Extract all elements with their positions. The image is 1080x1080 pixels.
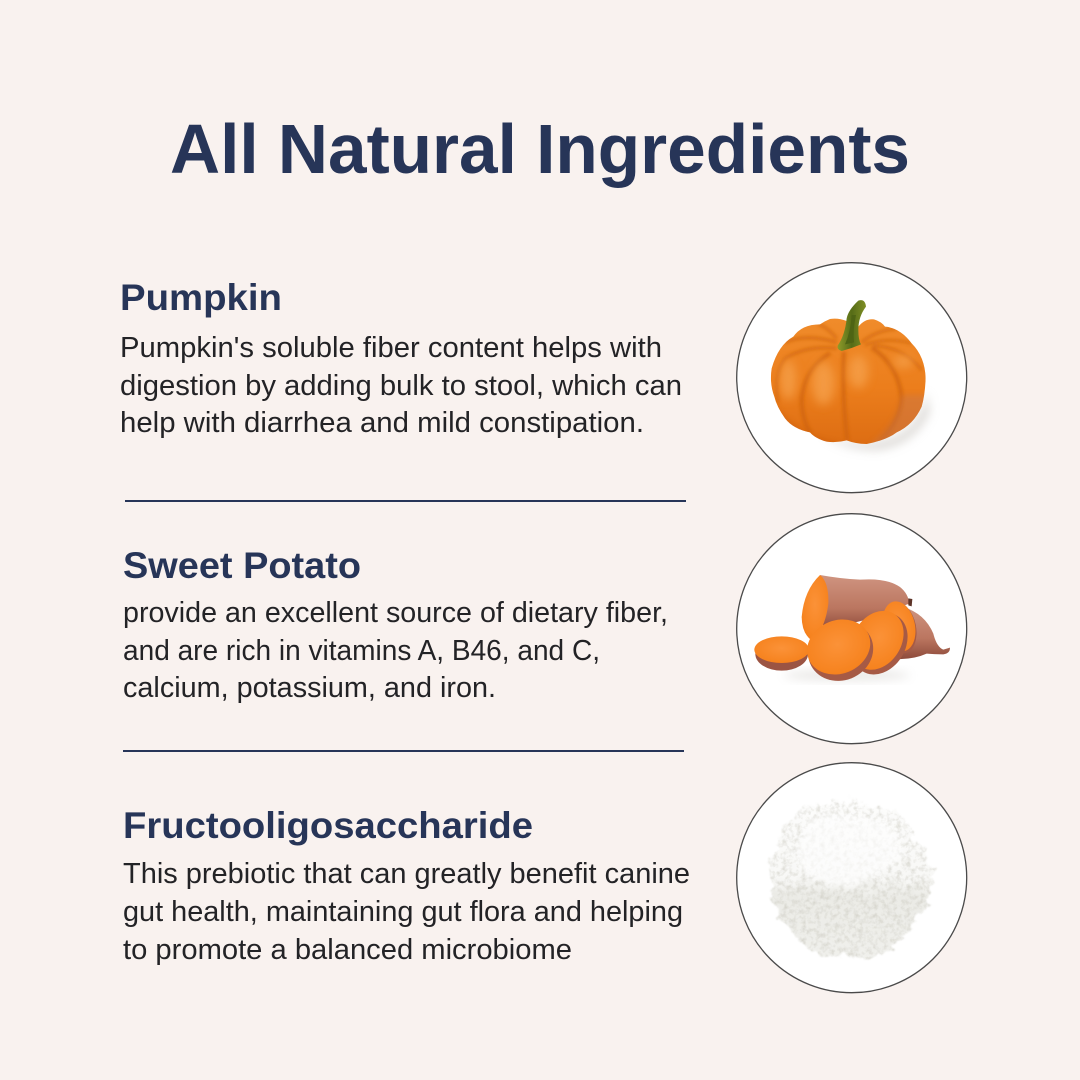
cut face of whole potato: [802, 575, 828, 640]
text block: pumpkin description: [120, 332, 682, 439]
text block: fructooligosaccharide description: to promote a balanced microbiome: [123, 934, 572, 966]
heading: fructooligosaccharide: Fructooligosaccharide: [123, 805, 533, 846]
icon: sweet potato in circle: [737, 514, 967, 744]
text block: pumpkin description: Pumpkin's soluble fiber content helps with: [120, 332, 662, 364]
panel: sweet potato: [123, 545, 668, 704]
panel: fructooligosaccharide: [123, 805, 690, 966]
icon: white powder in circle: [737, 763, 967, 993]
panel: pumpkin: [120, 277, 682, 439]
text block: fructooligosaccharide description: [123, 858, 690, 966]
text block: sweet potato description: [123, 597, 668, 704]
heading: pumpkin: Pumpkin: [120, 277, 282, 318]
back slice: [879, 599, 921, 656]
text block: pumpkin description: digestion by adding bulk to stool, which can: [120, 370, 682, 402]
left slice: [755, 637, 808, 671]
heading: sweet potato: Sweet Potato: [123, 545, 361, 586]
middle slice: [841, 603, 919, 685]
whole potato body: [820, 575, 909, 630]
text block: sweet potato description: provide an excellent source of dietary fiber,: [123, 597, 668, 629]
front slice: [799, 611, 882, 691]
icon: pumpkin in circle: [737, 263, 967, 493]
stem: [837, 300, 866, 351]
lower shade: [872, 394, 924, 442]
rib highlights: [780, 355, 913, 405]
text block: sweet potato description: calcium, potassium, and iron.: [123, 672, 496, 704]
title: All Natural Ingredients: [170, 110, 910, 188]
text block: fructooligosaccharide description: This prebiotic that can greatly benefit canine: [123, 858, 690, 890]
text block: sweet potato description: and are rich in vitamins A, B46, and C,: [123, 635, 600, 667]
text block: pumpkin description: help with diarrhea and mild constipation.: [120, 407, 644, 439]
rib grooves: [777, 324, 922, 442]
text block: fructooligosaccharide description: gut health, maintaining gut flora and helping: [123, 896, 683, 928]
